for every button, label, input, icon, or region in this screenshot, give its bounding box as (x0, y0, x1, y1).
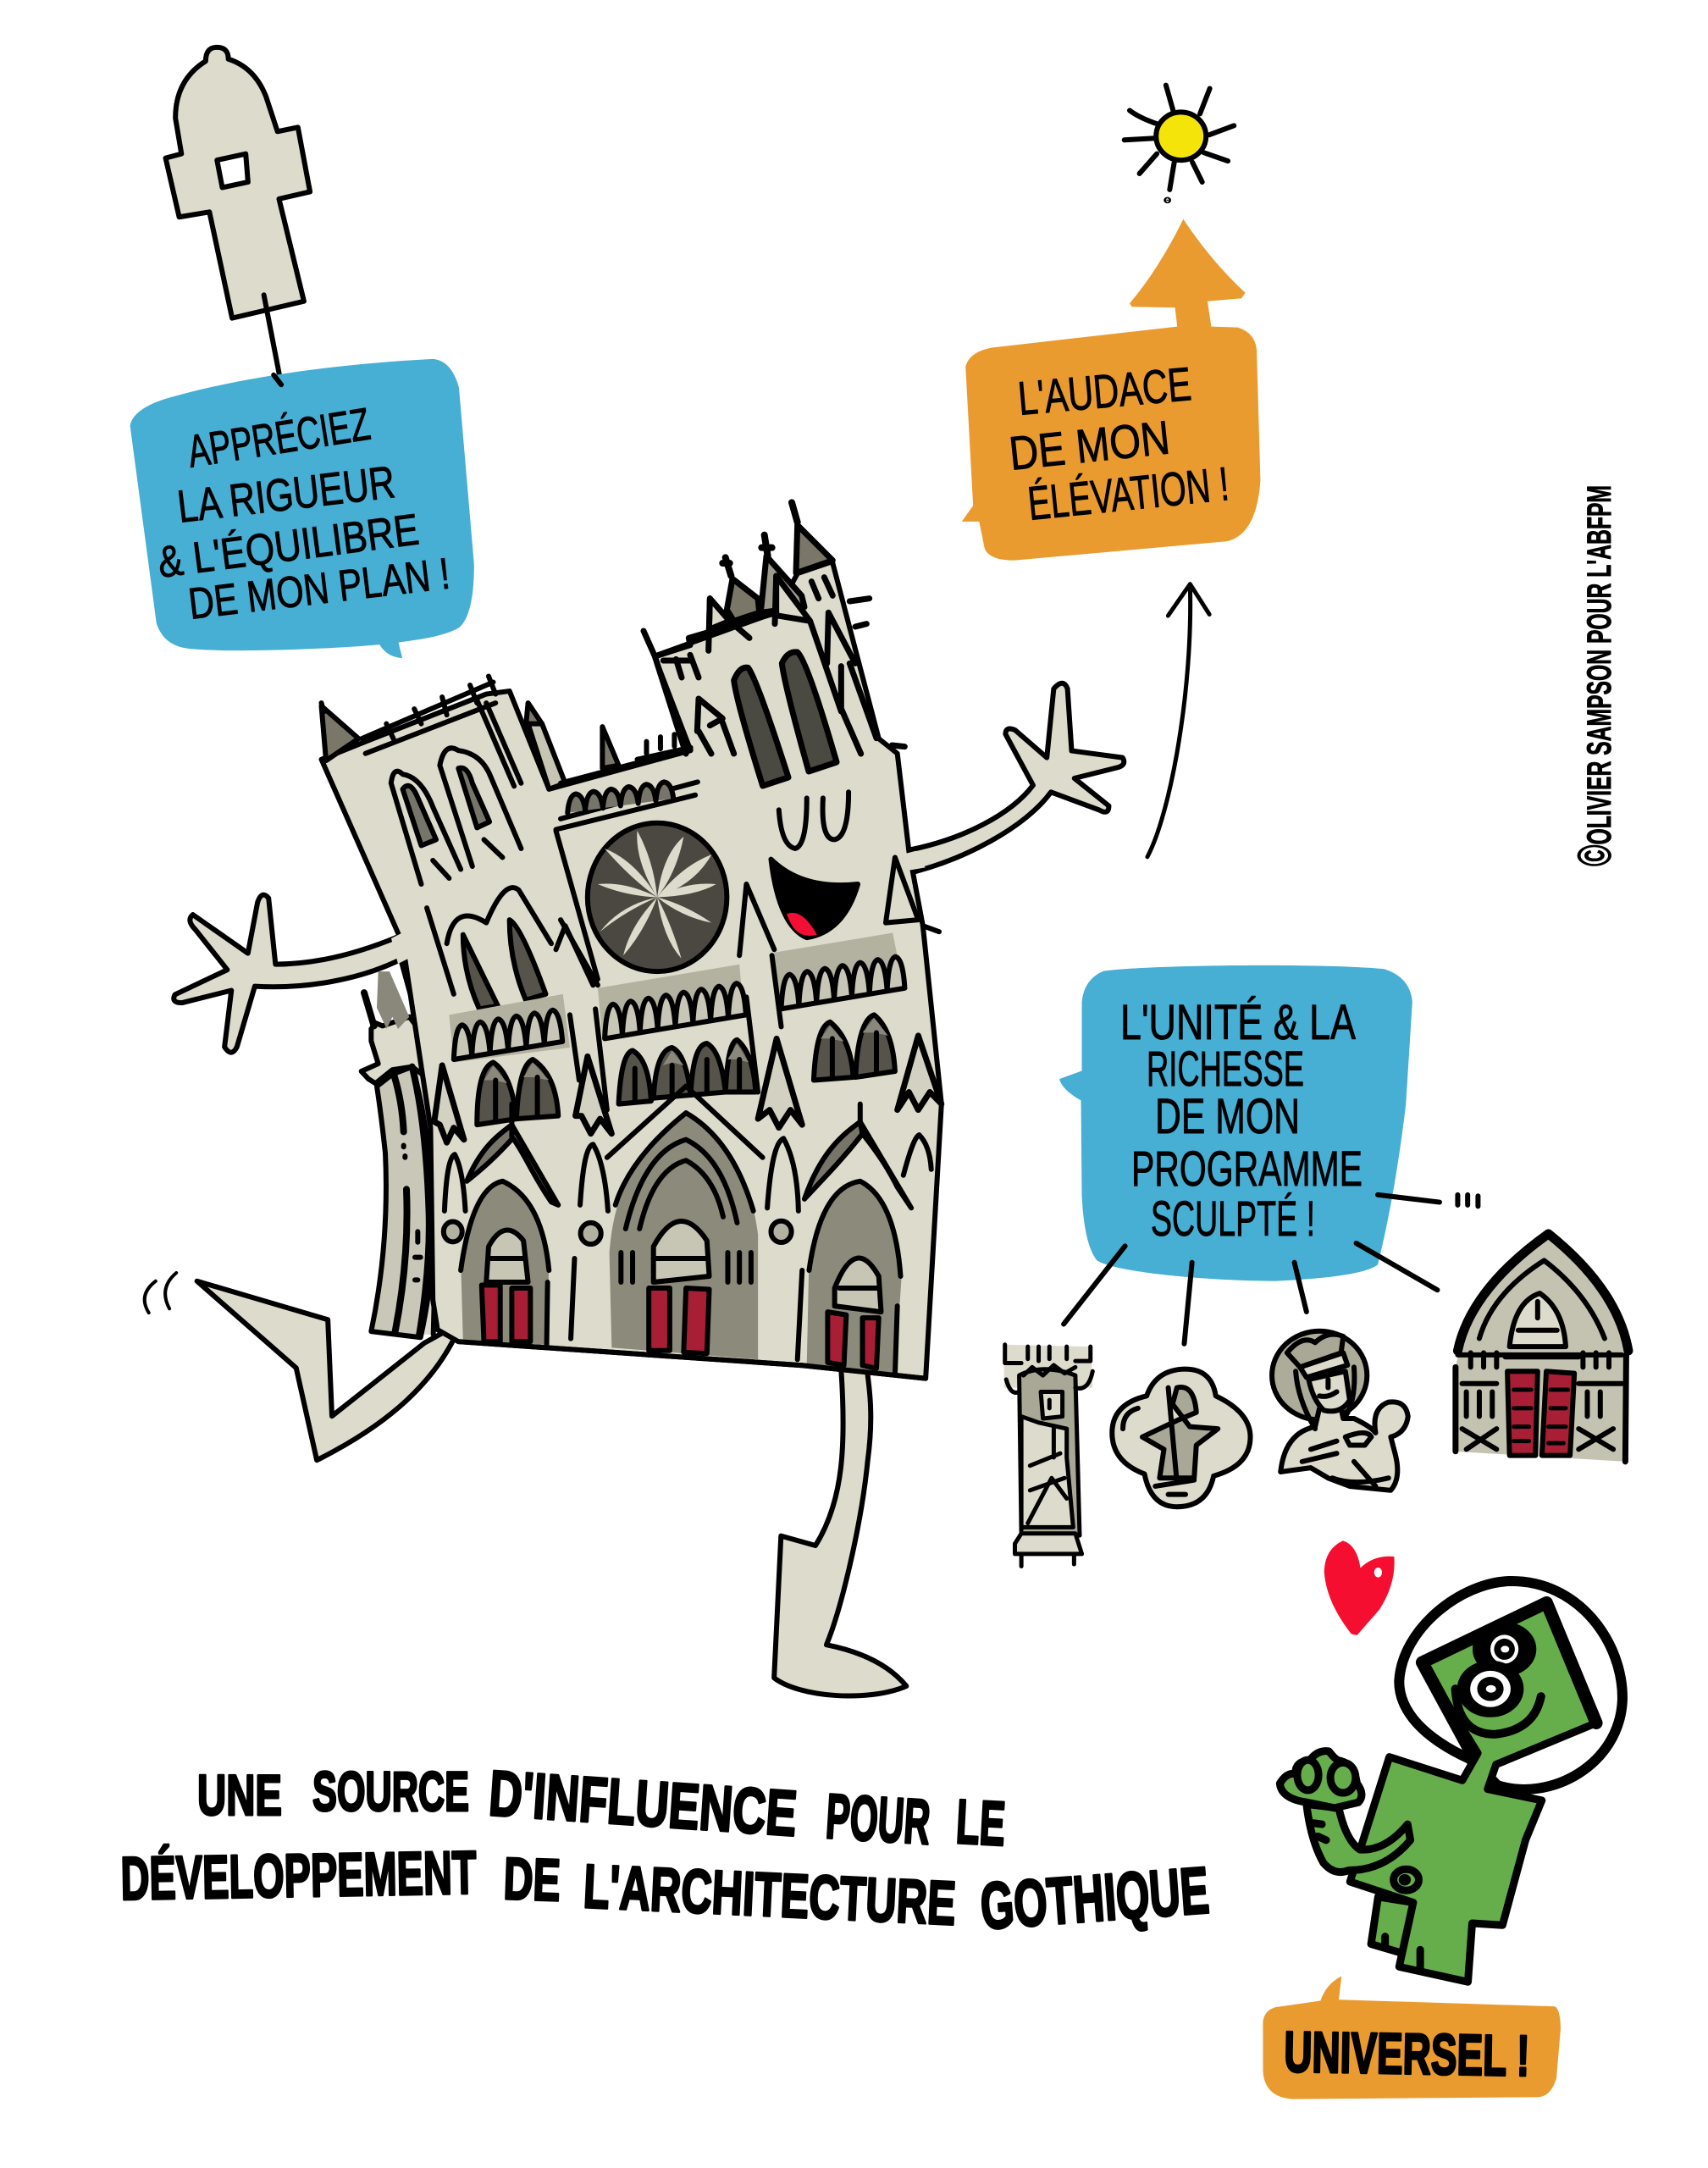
connector lines to sculptures (1064, 1195, 1478, 1344)
speech bubble: universal (1263, 1977, 1561, 2099)
copyright credit: ©OLIVIER SAMPSON POUR L'ABFPM (1567, 485, 1621, 866)
plan of the cathedral (166, 47, 310, 384)
right leg (774, 1357, 906, 1696)
left arm (174, 895, 402, 1053)
left leg (197, 1281, 462, 1460)
title: DÉVELOPPEMENT (120, 1839, 477, 1913)
hand (1280, 1751, 1362, 1808)
gallery bands (449, 933, 904, 1062)
green character (1280, 1581, 1622, 1982)
dark windows (477, 1015, 895, 1125)
icon: sun (1125, 86, 1234, 201)
right arm joint (902, 851, 926, 871)
helmet (1399, 1581, 1622, 1789)
speech bubble: plan: DE MON PLAN ! (186, 550, 452, 629)
face: eyes (779, 792, 848, 849)
speech bubble: sculpted programme: DE MON (1155, 1089, 1300, 1144)
title: D'INFLUENCE (487, 1757, 799, 1850)
right tower top: spires and windows (644, 502, 904, 786)
title (120, 1757, 1212, 1944)
title: GOTHIQUE (978, 1852, 1212, 1944)
facade outline bottom (458, 1341, 926, 1379)
speech bubble: plan: APPRÉCIEZ (184, 399, 373, 478)
speech bubble: sculpted programme: RICHESSE (1147, 1042, 1304, 1097)
icon: medallion (1112, 1369, 1251, 1507)
icon: portal (1453, 1231, 1628, 1462)
icon: heart (1324, 1540, 1395, 1635)
title: SOURCE (312, 1760, 469, 1822)
speech bubble: plan (130, 359, 474, 658)
gables (467, 1122, 911, 1208)
portals (461, 1113, 902, 1374)
cathedral character (322, 502, 942, 1379)
doors (482, 1286, 879, 1369)
motion marks (145, 1273, 176, 1313)
icon: statue (1004, 1345, 1092, 1566)
smile (1456, 1689, 1541, 1734)
left tower windows (391, 748, 521, 884)
leg (1371, 1897, 1413, 1954)
pinnacles (434, 1036, 942, 1142)
arm (1307, 1804, 1411, 1872)
head and body (1350, 1602, 1596, 1982)
speech bubble: elevation with orange arrow: ÉLÉVATION ! (1025, 456, 1231, 530)
rose window (588, 823, 727, 971)
face: mouth (771, 860, 858, 937)
eyes (1476, 1626, 1533, 1673)
title: POUR (824, 1780, 932, 1857)
nave gallery (556, 749, 698, 979)
speech bubble: sculpted programme: PROGRAMME (1131, 1142, 1363, 1197)
title: UNE (197, 1763, 282, 1828)
speech bubble: sculpted programme (1059, 965, 1412, 1281)
title: LE (954, 1786, 1007, 1859)
speech bubble: elevation with orange arrow: L'AUDACE (1016, 357, 1193, 425)
left side buttress (362, 956, 440, 1337)
facade (322, 561, 942, 1379)
character limbs: arms and legs (174, 683, 1124, 1696)
small gables around the rose (556, 857, 939, 985)
speech bubble: sculpted programme: SCULPTÉ ! (1151, 1192, 1315, 1247)
speech bubble: elevation with orange arrow (962, 219, 1260, 561)
title: DE (502, 1845, 561, 1913)
icon: crowned madonna and child (1272, 1331, 1408, 1490)
arrow: upward elevation (1147, 584, 1209, 857)
speech bubble: sculpted programme: L'UNITÉ & LA (1120, 995, 1356, 1050)
speech bubble: plan: & L'ÉQUILIBRE (155, 505, 422, 588)
left arm joint (391, 930, 415, 964)
speech bubble: elevation with orange arrow: DE MON (1007, 410, 1172, 480)
right arm (902, 683, 1124, 875)
left spires (322, 703, 619, 768)
navel (1394, 1869, 1418, 1890)
speech bubble: plan: LA RIGUEUR (174, 456, 398, 533)
title: L'ARCHITECTURE (582, 1852, 958, 1938)
lancets and oculi (445, 1135, 931, 1211)
speech bubble: universal: UNIVERSEL ! (1284, 2020, 1530, 2088)
